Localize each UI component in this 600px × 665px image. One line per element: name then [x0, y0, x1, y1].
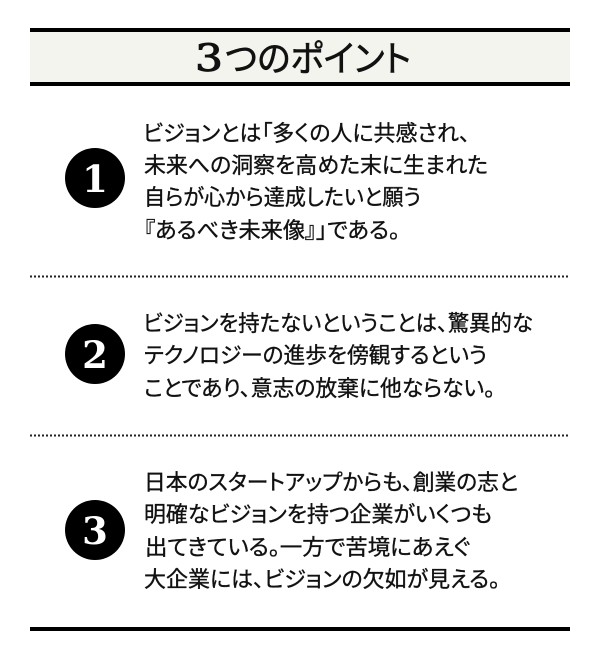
point 1 text: 未来への洞察を高めた末に生まれた	[144, 153, 488, 178]
point 2 text: ビジョンを持たないということは、驚異的な	[143, 311, 533, 336]
point 1 text	[143, 121, 488, 243]
point 3 text: 大企業には、ビジョンの欠如が見える。	[144, 567, 500, 592]
point 2 text: ことであり、意志の放棄に他ならない。	[144, 376, 495, 401]
point 1	[65, 121, 488, 243]
point 3	[65, 470, 518, 592]
point 3 text	[144, 470, 518, 592]
point 3 text: 日本のスタートアップからも、創業の志と	[144, 470, 518, 495]
point 2 text	[143, 311, 533, 401]
icon: number 1: 1	[82, 157, 108, 201]
point 3 text: 出てきている。一方で苦境にあえぐ	[145, 535, 470, 560]
point 2	[65, 311, 533, 401]
title banner	[30, 28, 570, 86]
icon: number 2: 2	[82, 333, 108, 377]
point 1 text: ビジョンとは「多くの人に共感され、	[143, 121, 470, 146]
icon: number 3	[65, 500, 125, 560]
point 3 text: 明確なビジョンを持つ企業がいくつも	[144, 502, 492, 527]
icon: number 1	[65, 148, 125, 208]
icon: number 2	[65, 324, 125, 384]
point 2 text: テクノロジーの進歩を傍観するという	[144, 343, 487, 368]
title: つのポイント	[225, 38, 411, 79]
point 1 text: 自らが心から達成したいと願う	[144, 185, 421, 210]
point 1 text: 『あるべき未来像』」である。	[144, 218, 400, 243]
title: 3	[195, 37, 223, 80]
icon: number 3: 3	[82, 509, 108, 553]
